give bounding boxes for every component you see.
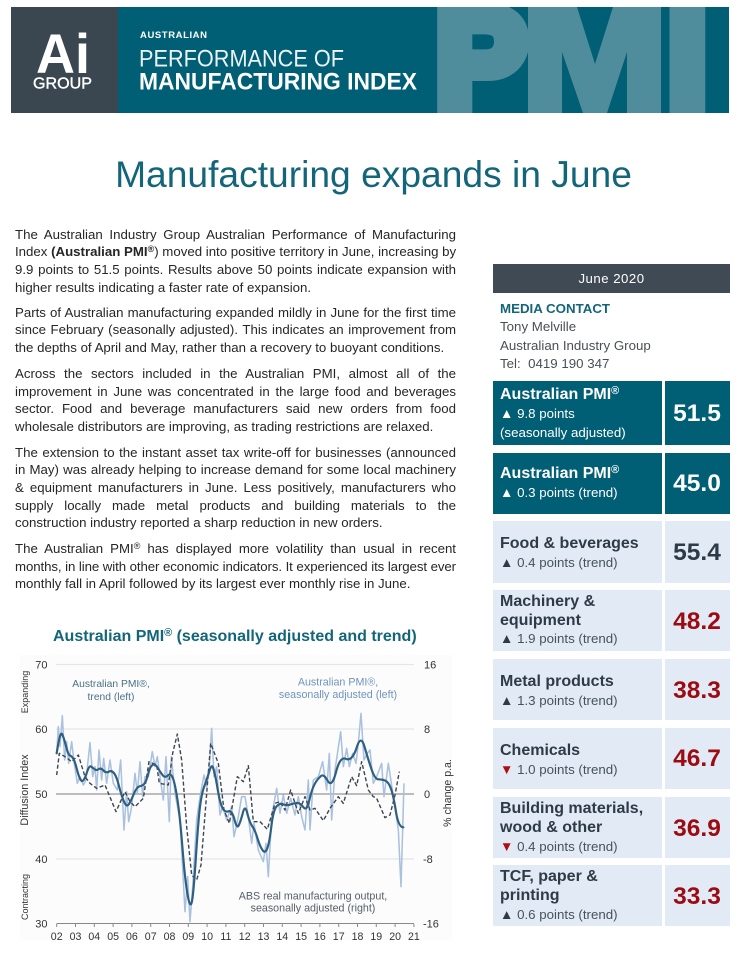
right axis labels: -8 xyxy=(423,854,433,866)
media contact: Australian Industry Group xyxy=(500,338,651,353)
text block: tax write-off: in May) was already helping to increase demand for some local machinery xyxy=(15,462,456,477)
right axis labels: 0 xyxy=(424,789,430,801)
panel: Metal products xyxy=(493,659,662,720)
media contact: Tony Melville xyxy=(500,319,576,334)
text block: volatility: monthly fall in April followed by its largest ever monthly rise in June. xyxy=(15,576,410,591)
banner heading: AUSTRALIAN xyxy=(140,30,207,41)
left axis labels: 50 xyxy=(35,789,48,801)
panel: Food & beverages xyxy=(493,521,662,583)
panel: Australian PMI seasonally adjusted: Australian PMI® xyxy=(500,385,619,403)
value: 33.3: 33.3 xyxy=(673,883,721,910)
text block: conditions: Parts of Australian manufacturing expanded mildly in June for the first time xyxy=(15,304,456,320)
text block: intro: The Australian Industry Group Australian Performance of Manufacturing xyxy=(15,226,456,242)
logo panel: Ai xyxy=(36,22,90,85)
text block: tax write-off: construction industry reported a sharp reduction in new orders. xyxy=(15,515,383,530)
x axis labels: 07 xyxy=(145,931,157,943)
panel: Machinery & equipment: Machinery & xyxy=(500,593,595,610)
value: 55.4: 55.4 xyxy=(673,539,721,566)
date bar: June 2020 xyxy=(578,271,645,286)
text block: sectors: sector. Food and beverage manufacturers said new orders from food xyxy=(15,401,456,416)
panel: Australian PMI trend xyxy=(493,453,662,514)
panel: Building materials: ▼ 0.4 points (trend) xyxy=(500,839,618,854)
annotation: seasonally adjusted: seasonally adjusted (left) xyxy=(279,689,397,701)
panel: Food & beverages: Food & beverages xyxy=(500,535,639,552)
x axis labels: 05 xyxy=(107,931,119,943)
value: 38.3: 38.3 xyxy=(673,677,721,704)
annotation: ABS output: seasonally adjusted (right) xyxy=(251,902,375,914)
value: 36.9 xyxy=(665,797,730,858)
value: 55.4 xyxy=(665,521,730,583)
panel: Machinery & equipment: ▲ 1.9 points (trend) xyxy=(500,631,618,646)
left axis labels xyxy=(35,660,48,930)
media contact: Tel: 0419 190 347 xyxy=(500,356,609,371)
text block: intro: Index (Australian PMI®) moved into positive territory in June, increasing by xyxy=(15,244,456,259)
panel: TCF, paper & printing: ▲ 0.6 points (trend) xyxy=(500,907,618,922)
text block: tax write-off: The extension to the instant asset tax write-off for businesses (announced xyxy=(15,445,456,460)
date bar xyxy=(493,264,730,293)
x axis labels: 21 xyxy=(408,931,420,943)
annotation: trend: trend (left) xyxy=(88,692,134,703)
x axis labels: 18 xyxy=(352,931,363,943)
text block: sectors: improvement in June was concentrated in the large food and beverages xyxy=(15,384,456,399)
panel: Australian PMI trend: ▲ 0.3 points (trend) xyxy=(500,485,618,500)
title: Manufacturing expands in June xyxy=(115,153,632,195)
banner heading: MANUFACTURING INDEX xyxy=(139,68,417,96)
axis titles: % change p.a. xyxy=(442,759,454,827)
axis titles: Expanding xyxy=(20,671,30,713)
x axis labels: 09 xyxy=(182,931,194,943)
x axis labels: 16 xyxy=(314,931,326,943)
left axis labels: 70 xyxy=(35,660,48,672)
banner heading: PERFORMANCE OF xyxy=(139,46,344,72)
panel: Australian PMI seasonally adjusted xyxy=(493,381,662,445)
value: 36.9: 36.9 xyxy=(673,815,721,842)
logo panel xyxy=(11,7,118,113)
x axis labels xyxy=(51,931,420,943)
text block: volatility: The Australian PMI® has displayed more volatility than usual in recent xyxy=(15,541,456,556)
text block: sectors: wholesale distributors are improving, as trading restrictions are relaxed. xyxy=(15,419,433,434)
series: seasonally adjusted xyxy=(57,713,404,922)
series: trend xyxy=(57,734,403,904)
value: 46.7 xyxy=(665,728,730,789)
text block: volatility: months, in line with other economic indicators. It experienced its largest ever xyxy=(15,559,456,574)
panel: Food & beverages: ▲ 0.4 points (trend) xyxy=(500,555,618,570)
panel: TCF, paper & printing: printing xyxy=(500,887,560,904)
value: 33.3 xyxy=(665,865,730,926)
value: 48.2 xyxy=(665,590,730,651)
left axis labels: 60 xyxy=(35,724,48,736)
right axis labels xyxy=(423,660,439,930)
x axis labels: 04 xyxy=(88,931,100,943)
x axis labels: 20 xyxy=(389,931,401,943)
x axis labels: 12 xyxy=(239,931,251,943)
annotation: seasonally adjusted: Australian PMI®, xyxy=(298,676,378,688)
panel: Metal products: Metal products xyxy=(500,673,614,690)
panel: Chemicals: Chemicals xyxy=(500,742,580,759)
media contact: MEDIA CONTACT xyxy=(500,301,610,316)
panel: Building materials xyxy=(493,797,662,858)
line chart xyxy=(19,660,454,943)
x axis labels: 19 xyxy=(370,931,382,943)
right axis labels: -16 xyxy=(423,918,439,930)
panel: Chemicals xyxy=(493,728,662,789)
logo panel: GROUP xyxy=(33,76,92,92)
left axis labels: 40 xyxy=(35,854,48,866)
value: 48.2: 48.2 xyxy=(673,608,721,635)
x axis labels: 06 xyxy=(126,931,138,943)
x axis labels: 15 xyxy=(295,931,307,943)
panel: Australian PMI seasonally adjusted: ▲ 9.8 points xyxy=(500,406,575,421)
text block: tax write-off xyxy=(15,445,456,530)
value: 51.5 xyxy=(665,381,730,445)
panel: Machinery & equipment: equipment xyxy=(500,612,581,629)
axis titles: Contracting xyxy=(20,874,30,920)
x axis labels: 03 xyxy=(70,931,81,943)
x axis labels: 14 xyxy=(276,931,288,943)
value: 45.0: 45.0 xyxy=(673,470,721,497)
left axis labels: 30 xyxy=(35,918,48,930)
text block: sectors xyxy=(15,366,456,434)
axis titles: Diffusion Index xyxy=(19,754,31,826)
x axis labels: 11 xyxy=(220,931,232,943)
panel: Metal products: ▲ 1.3 points (trend) xyxy=(500,693,618,708)
text block: tax write-off: supply locally made metal products and building materials to the xyxy=(15,498,456,513)
annotation: trend: Australian PMI®, xyxy=(72,679,150,690)
series: ABS output xyxy=(57,734,399,880)
panel: TCF, paper & printing: TCF, paper & xyxy=(500,868,598,885)
text block: tax write-off: & equipment manufacturers in June. Less positively, manufacturers who xyxy=(15,480,456,495)
panel: Machinery & equipment xyxy=(493,590,662,651)
text block: intro: 9.9 points to 51.5 points. Results above 50 points indicate expansion with xyxy=(15,262,456,277)
text block: intro xyxy=(15,226,456,295)
text block: conditions xyxy=(15,304,456,355)
large PMI watermark xyxy=(437,7,706,113)
value: 51.5: 51.5 xyxy=(673,400,721,427)
header banner xyxy=(11,7,729,113)
x axis labels: 17 xyxy=(333,931,345,943)
chart title: Australian PMI® (seasonally adjusted and trend) xyxy=(53,627,417,645)
value: 46.7: 46.7 xyxy=(673,745,721,772)
x axis labels: 08 xyxy=(164,931,175,943)
panel: Australian PMI trend: Australian PMI® xyxy=(500,464,619,482)
panel: Australian PMI seasonally adjusted: (seasonally adjusted) xyxy=(500,425,626,440)
value: 38.3 xyxy=(665,659,730,720)
text block: conditions: the depths of April and May, rather than a recovery to buoyant conditions. xyxy=(15,340,444,355)
right axis labels: 16 xyxy=(424,660,436,672)
text block: conditions: since February (seasonally adjusted). This indicates an improvement from xyxy=(15,322,456,337)
text block: sectors: Across the sectors included in the Australian PMI, almost all of the xyxy=(15,366,456,381)
panel: Chemicals: ▼ 1.0 points (trend) xyxy=(500,762,618,777)
value: 45.0 xyxy=(665,453,730,514)
panel: TCF, paper & printing xyxy=(493,865,662,926)
text block: volatility xyxy=(15,541,456,591)
x axis labels: 10 xyxy=(201,931,213,943)
annotation: ABS output: ABS real manufacturing output, xyxy=(239,890,387,902)
panel: Building materials: Building materials, xyxy=(500,800,643,817)
media contact xyxy=(500,301,651,371)
right axis labels: 8 xyxy=(424,724,430,736)
x axis labels: 02 xyxy=(51,931,63,943)
text block: intro: higher results indicating a faster rate of expansion. xyxy=(15,280,311,295)
x axis labels: 13 xyxy=(258,931,269,943)
banner heading xyxy=(139,30,417,96)
panel: Building materials: wood & other xyxy=(500,819,602,836)
axis titles xyxy=(19,671,454,920)
